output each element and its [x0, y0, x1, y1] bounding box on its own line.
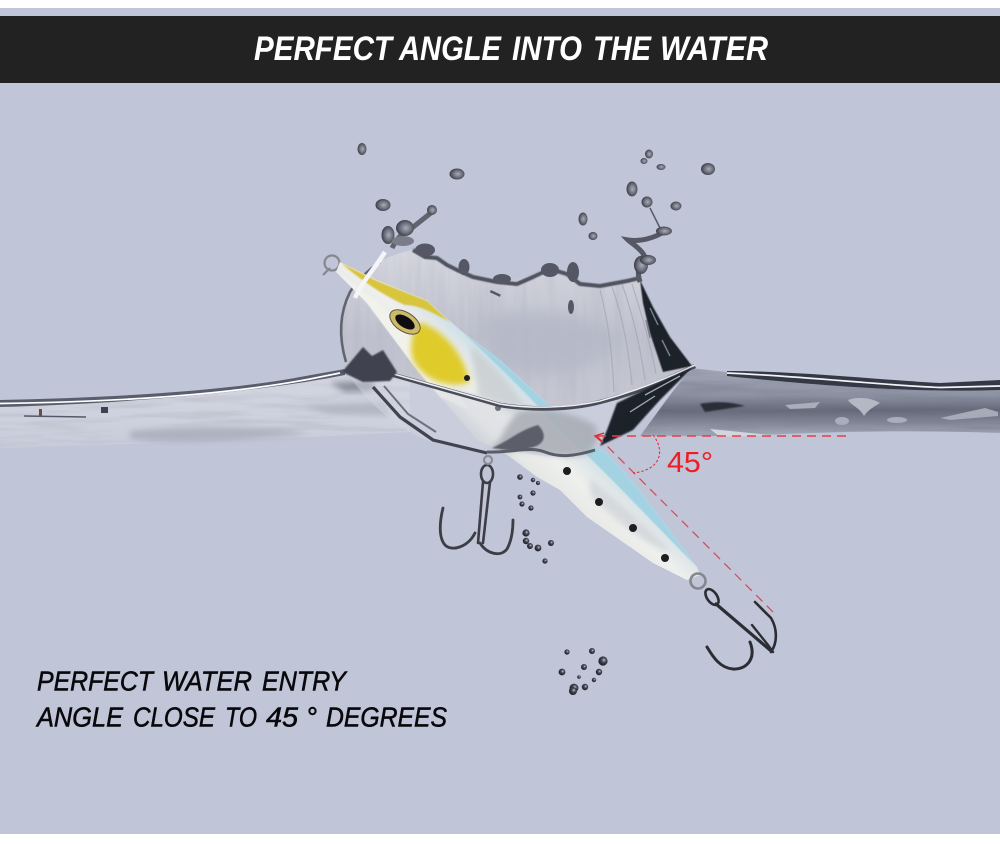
crown right dark wall [640, 280, 692, 372]
title: ANGLE [398, 30, 502, 68]
nose ring [323, 256, 340, 275]
water surface: left band [0, 369, 410, 450]
caption line 2: TO [225, 702, 257, 732]
angle label: 45° [667, 447, 713, 479]
lure yellow back [341, 263, 450, 322]
caption line 1: WATER [162, 666, 252, 696]
rear treble hook [703, 587, 776, 669]
title banner [0, 16, 1000, 83]
caption line 1: PERFECT [37, 666, 155, 696]
caption [35, 666, 448, 732]
crown ribs [600, 284, 656, 392]
caption line 2: ANGLE [35, 702, 124, 732]
left fold [342, 347, 397, 382]
arrow tip [595, 433, 604, 442]
lure head silver [338, 272, 470, 410]
crown dark rim [413, 250, 640, 286]
lower fold over lure [490, 409, 597, 456]
caption line 2 [35, 702, 448, 732]
caption line 2: DEGREES [326, 702, 448, 732]
front treble hook [440, 456, 513, 554]
bubbles lower cluster [559, 648, 608, 695]
title: INTO [512, 30, 582, 68]
lure silver scales [470, 345, 535, 420]
left front wall [373, 387, 487, 453]
left splash column [382, 205, 437, 248]
crown right wall highlights [646, 308, 670, 356]
lure [323, 256, 706, 588]
caption line 2: 45 [266, 702, 299, 732]
tail ring [690, 574, 706, 588]
water bowl in front of lure [342, 252, 695, 456]
title [254, 30, 768, 68]
lure body [336, 262, 700, 580]
dark lower fold [492, 425, 544, 450]
right splash column [628, 208, 672, 282]
right dark wall [600, 367, 693, 446]
bowl rim [390, 366, 695, 408]
title: PERFECT [254, 30, 395, 68]
dark wall highlights [630, 376, 680, 412]
caption line 2: CLOSE [133, 702, 216, 732]
lure eye [386, 305, 424, 339]
dashed horizontal reference line [597, 435, 851, 437]
title: WATER [660, 30, 768, 68]
lure silver rear mottling [590, 478, 672, 552]
bowl rim highlight [390, 365, 695, 407]
caption line 1 [37, 666, 348, 696]
splash strand over lure [355, 252, 385, 298]
lure spots [464, 375, 669, 562]
bowl bottom edge [487, 450, 595, 456]
dashed lure axis line [597, 436, 773, 612]
lure yellow gill [411, 322, 470, 385]
water splash crown back wall [340, 205, 700, 408]
water droplets [358, 143, 715, 240]
bubbles near front hook [517, 474, 554, 564]
title: THE [593, 30, 652, 68]
water surface: right band [640, 365, 1000, 440]
caption line 1: ENTRY [262, 666, 348, 696]
crown left wall edge [341, 262, 380, 362]
angle annotation [595, 433, 851, 612]
crown spikes [415, 244, 579, 314]
caption line 2: ° [306, 702, 317, 732]
lure blue back stripe [462, 332, 697, 567]
angle arc [633, 435, 660, 473]
